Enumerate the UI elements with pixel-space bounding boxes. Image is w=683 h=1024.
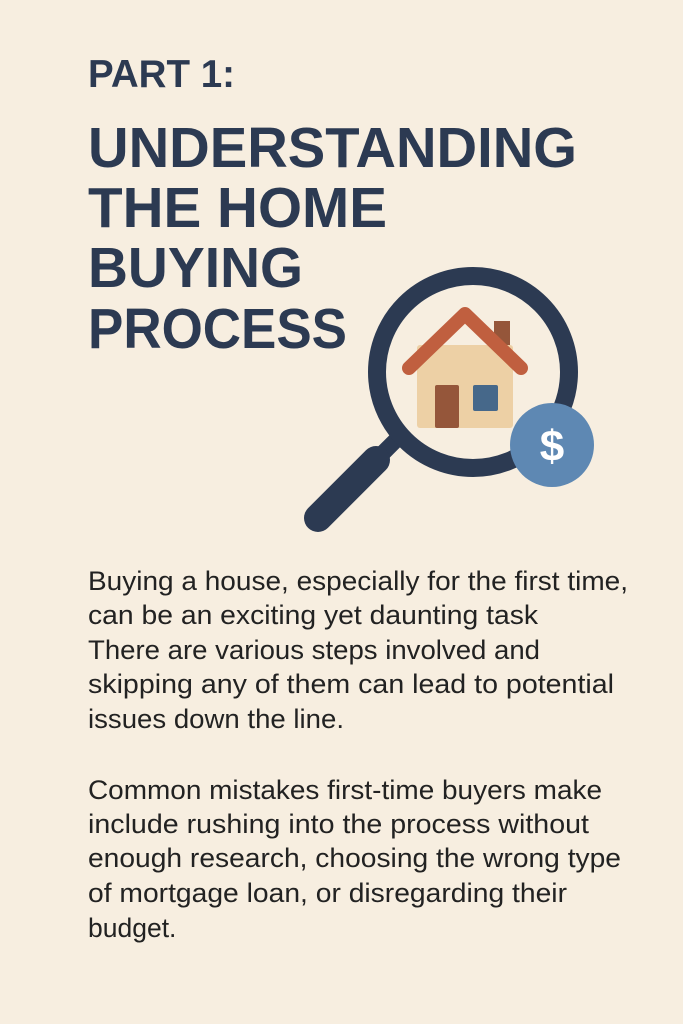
text block: paragraph 1: can be an exciting yet daunting task	[88, 600, 539, 630]
subtitle: part 1: PART 1:	[88, 53, 235, 96]
text block: paragraph 1: skipping any of them can lead to potential	[88, 669, 614, 699]
text block: paragraph 2: of mortgage loan, or disregarding their	[88, 878, 567, 908]
text block: paragraph 2: Common mistakes first-time buyers make	[88, 775, 602, 805]
magnifier lens	[377, 276, 569, 468]
title: BUYING	[88, 236, 303, 300]
text block: paragraph 2: include rushing into the process without	[88, 809, 590, 839]
title: UNDERSTANDING	[88, 116, 577, 180]
text block: paragraph 2	[88, 775, 621, 943]
text block: paragraph 1: There are various steps involved and	[88, 635, 540, 665]
house	[409, 314, 521, 428]
title: THE HOME	[88, 176, 387, 240]
text block: paragraph 1: issues down the line.	[88, 704, 344, 734]
text block: paragraph 2: enough research, choosing the wrong type	[88, 843, 621, 873]
text block: paragraph 2: budget.	[88, 913, 176, 943]
title	[88, 116, 577, 361]
dollar coin: $	[540, 422, 564, 471]
magnifier handle	[318, 438, 398, 518]
icon: magnifier with house and dollar coin	[318, 276, 594, 518]
dollar coin	[510, 403, 594, 487]
text block: paragraph 1: Buying a house, especially for the first time,	[88, 566, 628, 596]
title: PROCESS	[88, 297, 347, 361]
text block: paragraph 1	[88, 566, 628, 734]
